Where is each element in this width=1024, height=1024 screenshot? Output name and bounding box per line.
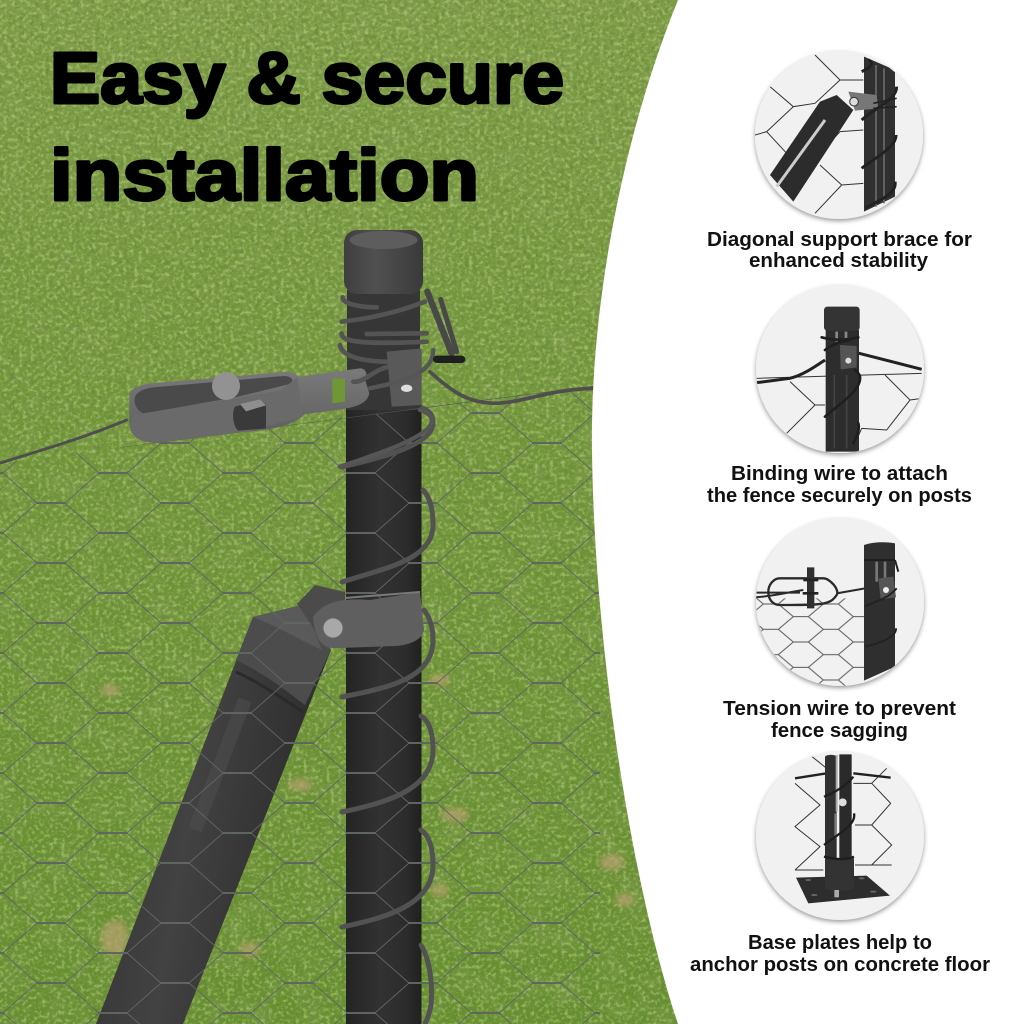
- caption: [690, 932, 990, 976]
- caption: Diagonal support brace for: [707, 229, 972, 251]
- post top cap: [344, 230, 423, 294]
- caption: Tension wire to prevent: [723, 698, 956, 720]
- wire tensioner and top wire wraps, drawn at 3x: [0, 292, 593, 467]
- caption: fence sagging: [771, 720, 908, 742]
- caption: Base plates help to: [748, 932, 932, 954]
- caption: [707, 463, 972, 507]
- feature 2: binding wire: [707, 285, 972, 507]
- feature 1: diagonal brace: [707, 51, 972, 272]
- circle photo: binding wire: [756, 285, 924, 453]
- caption: anchor posts on concrete floor: [690, 954, 990, 976]
- diagonal support brace: [96, 606, 331, 1024]
- caption: the fence securely on posts: [707, 485, 972, 507]
- brace clamp and bolt: [297, 585, 424, 648]
- wire wraps on post top: [340, 297, 427, 382]
- white curved panel: [592, 0, 1024, 1024]
- tensioner body: [129, 368, 369, 443]
- fence post: [346, 290, 422, 1024]
- bolt head: [323, 618, 343, 638]
- tension wires: [0, 372, 593, 463]
- caption: [723, 698, 956, 742]
- caption: [707, 229, 972, 272]
- hexagonal chicken wire mesh: [0, 385, 600, 1024]
- circle photo: tensioner: [740, 518, 924, 688]
- hook wires: [427, 292, 462, 359]
- title: Easy & secure: [50, 39, 564, 119]
- feature 3: tension wire: [723, 518, 956, 742]
- circle photo: brace joint: [755, 51, 923, 219]
- caption: enhanced stability: [749, 250, 929, 272]
- post clip: [387, 348, 422, 407]
- feature 4: base plate: [690, 752, 990, 976]
- caption: Binding wire to attach: [731, 463, 948, 485]
- photo scene: grass, fence post and mesh: [0, 0, 678, 1024]
- spiral binding wire along post: [342, 408, 433, 1024]
- circle photo: base plate: [756, 752, 924, 920]
- loop wires over clip: [340, 350, 433, 467]
- title: [50, 39, 564, 216]
- title: installation: [50, 136, 479, 216]
